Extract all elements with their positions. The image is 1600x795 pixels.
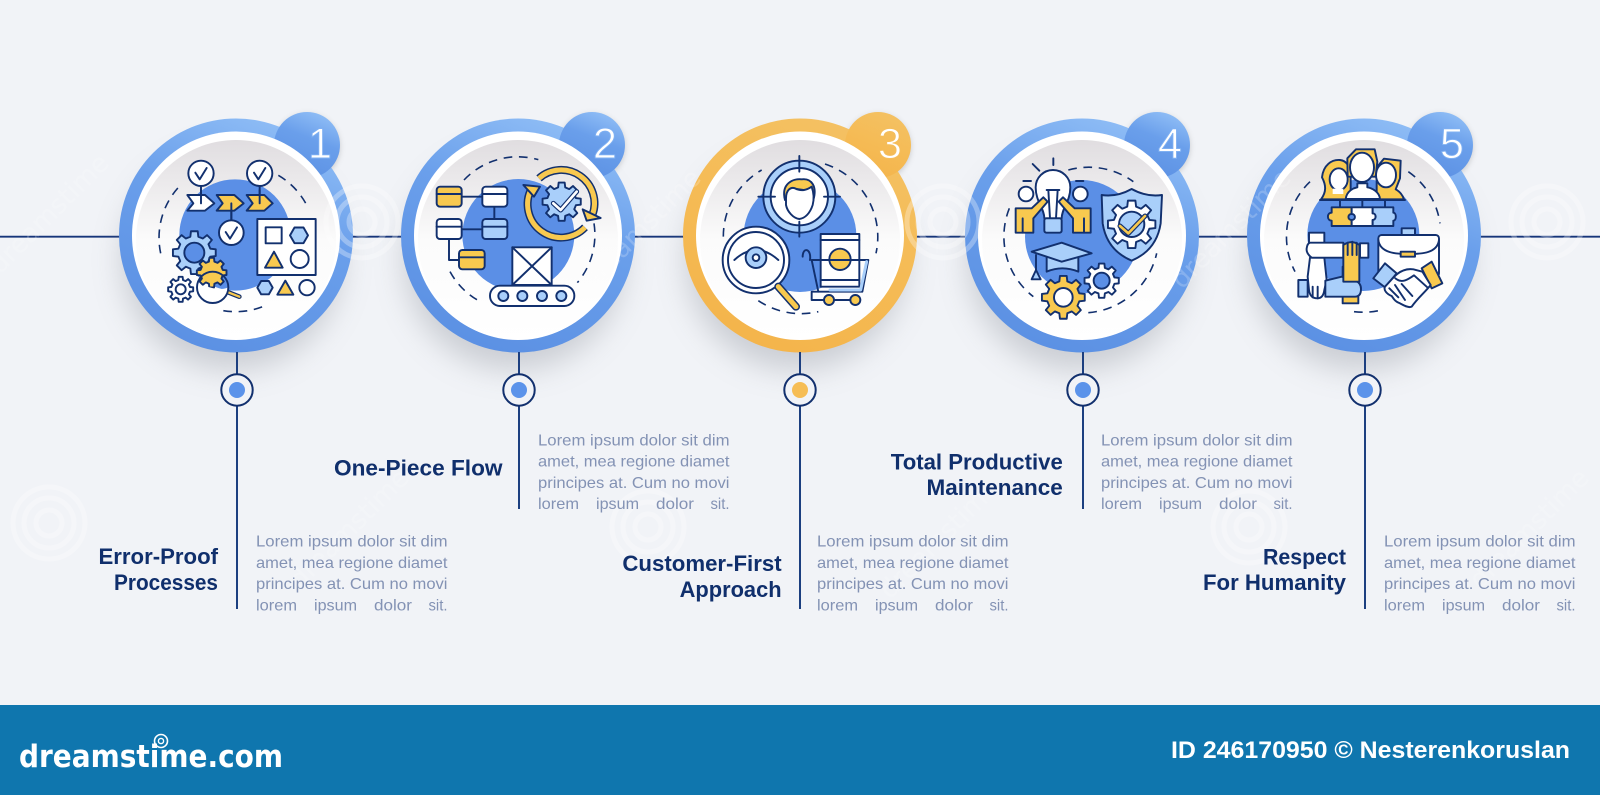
connector and node 5 <box>1349 352 1381 609</box>
footer bar <box>0 705 1600 795</box>
connector and node 4 <box>1067 352 1099 509</box>
number badge 4: 4 <box>1158 120 1182 168</box>
heading: Respect For Humanity <box>1203 544 1347 595</box>
body text 1: ipsum <box>314 598 357 614</box>
number badge 1: 1 <box>308 120 332 168</box>
step 4 circle <box>965 112 1199 370</box>
heading: Total Productive Maintenance: Total Productive <box>891 449 1063 474</box>
body text 3 <box>817 534 1009 614</box>
icon: error-proof processes <box>159 161 316 312</box>
body text 1: principes at. Cum no movi <box>256 576 448 593</box>
body text 4: ipsum <box>1159 496 1202 513</box>
body text 2: principes at. Cum no movi <box>538 475 730 492</box>
body text 2: Lorem ipsum dolor sit dim <box>538 432 730 449</box>
body text 4 <box>1101 432 1293 513</box>
watermark overlay: dreamstime <box>284 463 415 595</box>
image id credit: ID 246170950 © Nesterenkoruslan <box>1171 737 1570 764</box>
step 3 circle <box>683 112 917 370</box>
heading: Total Productive Maintenance: Maintenance <box>926 475 1063 500</box>
connector and node 1 <box>221 352 253 609</box>
connector and node 3 <box>784 352 816 609</box>
watermark overlay: dreamstime <box>576 163 707 295</box>
step 2 circle <box>401 112 635 370</box>
body text 5: principes at. Cum no movi <box>1384 576 1576 593</box>
body text 3: sit. <box>990 598 1008 614</box>
heading: Customer-First Approach <box>622 551 782 602</box>
dreamstime logo: dreamstime.com <box>19 739 283 775</box>
heading: Respect For Humanity: For Humanity <box>1203 570 1347 595</box>
step 1 circle <box>119 112 353 370</box>
icon: one-piece flow <box>437 157 601 306</box>
number badge 5: 5 <box>1440 120 1464 168</box>
heading: Total Productive Maintenance <box>891 449 1063 500</box>
body text 4: dolor <box>1219 496 1258 513</box>
body text 2: amet, mea regione diamet <box>538 454 730 471</box>
body text 2: lorem <box>538 496 579 513</box>
body text 1: lorem <box>256 598 297 614</box>
heading: Customer-First Approach: Approach <box>680 577 782 602</box>
watermark overlay <box>0 148 1595 605</box>
heading: Respect For Humanity: Respect <box>1263 544 1347 569</box>
watermark overlay: dreamstime <box>1464 463 1595 595</box>
horizontal timeline <box>0 236 1600 238</box>
heading: Customer-First Approach: Customer-First <box>622 551 782 576</box>
watermark overlay: dreamstime <box>1166 163 1297 295</box>
body text 3: principes at. Cum no movi <box>817 576 1008 593</box>
body text 3: lorem <box>817 598 858 614</box>
body text 5: sit. <box>1556 598 1576 614</box>
icon: customer-first approach <box>723 156 878 314</box>
body text 1: Lorem ipsum dolor sit dim <box>256 534 448 551</box>
step 5 circle <box>1247 112 1481 370</box>
heading: One-Piece Flow: One-Piece Flow <box>334 456 503 481</box>
body text 2: ipsum <box>596 496 639 513</box>
body text 5: ipsum <box>1442 598 1485 614</box>
body text 4: principes at. Cum no movi <box>1101 475 1292 492</box>
body text 4: lorem <box>1101 496 1142 513</box>
body text 4: Lorem ipsum dolor sit dim <box>1101 432 1292 449</box>
number badge 2: 2 <box>593 120 617 168</box>
body text 2: dolor <box>656 496 695 513</box>
body text 3: Lorem ipsum dolor sit dim <box>817 534 1008 551</box>
body text 5: lorem <box>1384 598 1425 614</box>
body text 2: sit. <box>710 496 730 513</box>
body text 1: amet, mea regione diamet <box>256 555 448 572</box>
body text 5: amet, mea regione diamet <box>1384 555 1576 572</box>
body text 2 <box>538 432 730 513</box>
connector and node 2 <box>503 352 535 509</box>
heading: Error-Proof Processes <box>98 544 219 595</box>
body text 4: sit. <box>1274 496 1292 513</box>
heading: Error-Proof Processes: Error-Proof <box>98 544 219 569</box>
icon: respect for humanity <box>1286 149 1442 312</box>
icon: total productive maintenance <box>1004 158 1162 319</box>
number badge 3: 3 <box>878 120 902 168</box>
body text 3: ipsum <box>875 598 918 614</box>
body text 4: amet, mea regione diamet <box>1101 454 1293 471</box>
body text 5 <box>1384 534 1576 614</box>
body text 5: dolor <box>1502 598 1541 614</box>
body text 1: dolor <box>374 598 413 614</box>
heading: Error-Proof Processes: Processes <box>114 570 218 595</box>
body text 1: sit. <box>428 598 448 614</box>
watermark overlay: dreamstime <box>874 473 1005 605</box>
body text 3: amet, mea regione diamet <box>817 555 1009 572</box>
body text 5: Lorem ipsum dolor sit dim <box>1384 534 1576 551</box>
body text 3: dolor <box>935 598 974 614</box>
body text 1 <box>256 534 448 614</box>
